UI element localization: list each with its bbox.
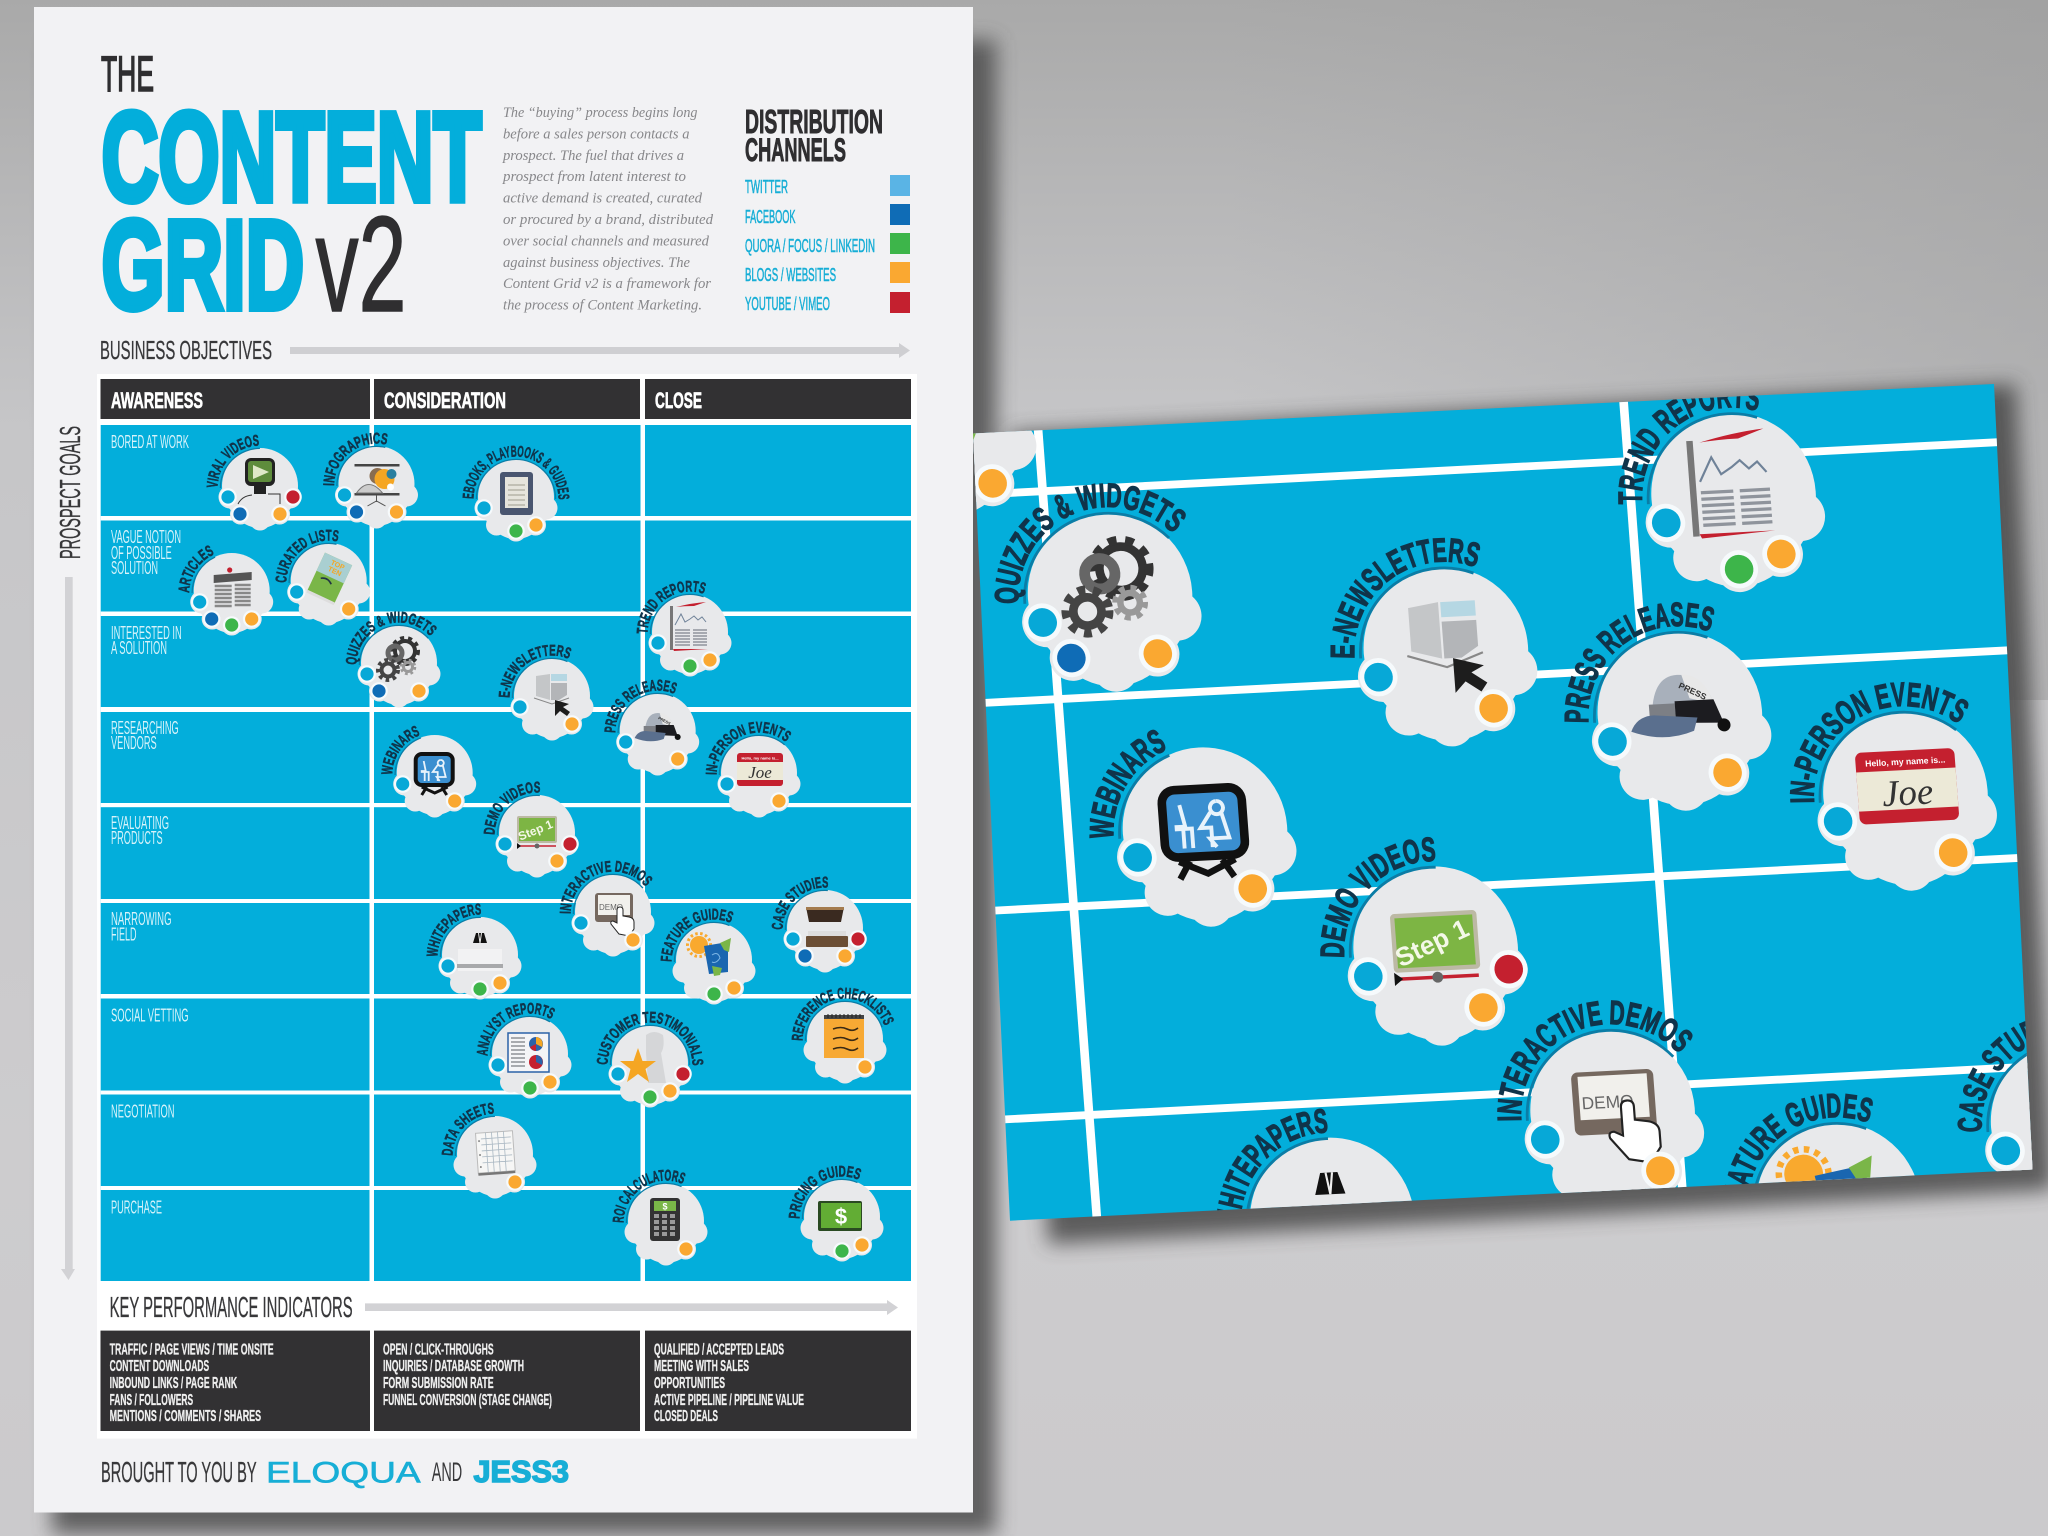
row labels: prospect goals: SOCIAL VETTING — [111, 1005, 189, 1025]
bubble: press releases: PRESS — [657, 715, 672, 726]
row labels: prospect goals: NARROWING — [111, 909, 172, 929]
bubble: analyst reports — [476, 1002, 572, 1098]
intro text block: or procured by a brand, distributed — [503, 212, 714, 228]
kpi box: awareness: TRAFFIC / PAGE VIEWS / TIME ONSITE — [110, 1342, 274, 1358]
bubble: curated lists: TEN — [327, 566, 342, 578]
intro text block: against business objectives. The — [503, 255, 691, 271]
kpi box: close — [645, 1331, 911, 1431]
intro text block: over social channels and measured — [503, 233, 710, 249]
bubble: in-person events: Hello, my name is... — [741, 756, 779, 760]
footer: credits: AND — [432, 1457, 462, 1487]
bubble: trend reports: TREND REPORTS — [636, 580, 706, 634]
footer: credits — [101, 1454, 569, 1490]
row labels: prospect goals: INTERESTED IN — [111, 623, 182, 643]
intro text block: active demand is created, curated — [503, 191, 703, 207]
bubble: ebooks, playbooks and guides — [462, 446, 570, 542]
panel bubble: feature guides: FEATURE GUIDES — [1725, 1093, 1873, 1185]
kpi box: close: OPPORTUNITIES — [654, 1375, 725, 1392]
bubble: demo videos — [484, 781, 579, 878]
panel bubble: quizzes and widgets: QUIZZES & WIDGETS — [994, 482, 1186, 604]
paper sheet: PROSPECT GOALS — [55, 426, 87, 559]
bubble: roi calculators: ROI CALCULATORS — [612, 1169, 686, 1223]
kpi box: awareness: MENTIONS / COMMENTS / SHARES — [110, 1408, 261, 1425]
bubble: reference checklists: REFERENCE CHECKLISTS — [792, 988, 894, 1041]
panel bubble: trend reports: TREND REPORTS — [1618, 396, 1759, 504]
intro text block: before a sales person contacts a — [503, 126, 690, 142]
bubble: quizzes and widgets: QUIZZES & WIDGETS — [346, 611, 437, 664]
arrow: prospect goals — [61, 577, 75, 1280]
kpi box: awareness: CONTENT DOWNLOADS — [110, 1358, 209, 1375]
panel bubble: demo videos: Step 1 — [1390, 913, 1473, 973]
kpi box: consideration: OPEN / CLICK-THROUGHS — [383, 1342, 494, 1358]
row labels: prospect goals: PURCHASE — [111, 1198, 162, 1218]
bubble: in-person events: Joe — [748, 763, 772, 782]
title: CONTENT: CONTENT — [102, 86, 482, 228]
bubble: interactive demos: DEMO — [599, 903, 623, 912]
kpi box: consideration: FUNNEL CONVERSION (STAGE CHANGE) — [383, 1392, 552, 1409]
row labels: prospect goals: NEGOTIATION — [111, 1102, 174, 1122]
column headers: CONSIDERATION — [384, 388, 506, 413]
legend: distribution channels — [745, 103, 910, 314]
bubble: curated lists: CURATED LISTS — [275, 530, 339, 582]
intro text block: the process of Content Marketing. — [503, 298, 702, 314]
panel bubble: press releases: PRESS RELEASES — [1564, 602, 1714, 722]
panel bubble: in-person events: Joe — [1881, 770, 1934, 814]
bubble: analyst reports: ANALYST REPORTS — [476, 1002, 555, 1056]
title: v2: v2 — [316, 188, 406, 340]
bubble: in-person events: IN-PERSON EVENTS — [706, 722, 792, 774]
bubble: pricing guides — [786, 1163, 884, 1262]
arrow: key performance indicators — [365, 1300, 898, 1315]
grid — [101, 425, 911, 1281]
white backing of grid — [97, 374, 917, 1439]
kpi box: close: ACTIVE PIPELINE / PIPELINE VALUE — [654, 1392, 804, 1409]
kpi box: consideration — [374, 1331, 640, 1431]
legend: distribution channels: FACEBOOK — [745, 207, 796, 227]
paper sheet — [34, 7, 973, 1512]
bubble: data sheets — [439, 1100, 536, 1198]
row labels: prospect goals: SOLUTION — [111, 558, 158, 578]
bubble: customer testimonials: CUSTOMER TESTIMONIALS — [596, 1012, 704, 1066]
bubble: demo videos: Step 1 — [516, 817, 555, 844]
intro text block: prospect. The fuel that drives a — [502, 148, 684, 164]
panel bubble: interactive demos: DEMO — [1581, 1091, 1634, 1113]
bubble: feature guides: FEATURE GUIDES — [660, 908, 734, 962]
footer: credits: JESS3 — [474, 1454, 569, 1489]
panel bubble: e-newsletters — [1330, 538, 1538, 746]
bubble: viral videos: VIRAL VIDEOS — [206, 434, 259, 488]
panel bubble: press releases — [1564, 602, 1772, 811]
bubble: e-newsletters — [498, 644, 594, 740]
bubble: curated lists — [275, 530, 370, 626]
kpi box: close: MEETING WITH SALES — [654, 1358, 749, 1375]
bubble: interactive demos — [560, 860, 654, 956]
footer: credits: BROUGHT TO YOU BY — [101, 1457, 257, 1489]
column headers: AWARENESS — [111, 388, 203, 413]
bubble: pricing guides: $ — [835, 1204, 847, 1229]
bubble: reference checklists — [792, 988, 894, 1084]
bubble: webinars: WEBINARS — [381, 726, 420, 774]
panel: zoomed crop of the grid — [973, 384, 2032, 1221]
row labels: prospect goals: PRODUCTS — [111, 828, 163, 848]
intro text block — [502, 105, 714, 314]
legend: distribution channels: YOUTUBE / VIMEO — [745, 294, 830, 314]
panel bubble: whitepapers: WHITEPAPERS — [1217, 1108, 1328, 1210]
heading: business objectives: BUSINESS OBJECTIVES — [100, 335, 272, 365]
kpi box: consideration: FORM SUBMISSION RATE — [383, 1375, 494, 1392]
bubble: curated lists: TOP — [329, 559, 345, 572]
legend: distribution channels: CHANNELS — [745, 132, 846, 168]
kpi box: close: CLOSED DEALS — [654, 1408, 718, 1425]
panel bubble: e-newsletters: E-NEWSLETTERS — [1330, 538, 1480, 658]
bubble: demo videos: DEMO VIDEOS — [484, 781, 540, 834]
panel bubble: webinars: WEBINARS — [1089, 730, 1166, 838]
intro text block: prospect from latent interest to — [502, 169, 686, 185]
bubble: e-newsletters: E-NEWSLETTERS — [498, 644, 572, 698]
bubble: in-person events — [706, 722, 800, 818]
row labels: prospect goals: VENDORS — [111, 733, 157, 753]
column headers — [100, 379, 911, 419]
bubble: webinars — [381, 726, 476, 818]
heading: key performance indicators: KEY PERFORMANCE INDICATORS — [110, 1292, 353, 1324]
paper drop shadow — [52, 40, 996, 1534]
bubble: press releases: PRESS RELEASES — [604, 679, 677, 733]
panel bubble: curated lists — [973, 430, 1036, 510]
bubble: viral videos — [206, 434, 302, 530]
panel bubble: in-person events: IN-PERSON EVENTS — [1790, 682, 1968, 802]
panel bubble: in-person events: Hello, my name is... — [1865, 755, 1946, 769]
panel bubble: feature guides — [1725, 1093, 1915, 1185]
bubble: data sheets: DATA SHEETS — [442, 1102, 494, 1156]
bubble: infographics — [323, 432, 418, 528]
bubble: infographics: INFOGRAPHICS — [323, 432, 388, 486]
bubble: case studies: CASE STUDIES — [772, 876, 828, 930]
row labels: prospect goals: BORED AT WORK — [111, 432, 189, 452]
row labels: prospect goals: RESEARCHING — [111, 718, 179, 738]
legend: distribution channels: BLOGS / WEBSITES — [745, 265, 836, 285]
panel bubble: in-person events — [1790, 682, 1997, 891]
panel bubble: press releases: PRESS — [1677, 680, 1708, 702]
panel bubble: case studies — [1957, 1021, 2032, 1172]
panel bubble: interactive demos — [1497, 1000, 1704, 1194]
legend: distribution channels: QUORA / FOCUS / LINKEDIN — [745, 236, 875, 256]
intro text block: Content Grid v2 is a framework for — [503, 276, 711, 292]
kpi box: awareness: INBOUND LINKS / PAGE RANK — [110, 1375, 237, 1392]
legend: distribution channels: DISTRIBUTION — [745, 103, 883, 140]
panel bubble: quizzes and widgets — [994, 482, 1202, 692]
bubble: whitepapers — [426, 903, 522, 1000]
row labels: prospect goals: OF POSSIBLE — [111, 543, 172, 563]
row labels: prospect goals: A SOLUTION — [111, 638, 167, 658]
kpi box: awareness: FANS / FOLLOWERS — [110, 1392, 193, 1409]
panel bubble: whitepapers — [1217, 1108, 1412, 1210]
panel bubble: demo videos — [1320, 836, 1528, 1046]
title: THE: THE — [101, 46, 154, 102]
footer: credits: ELOQUA — [266, 1456, 421, 1490]
bubble: feature guides — [660, 908, 756, 1004]
bubble: pricing guides: PRICING GUIDES — [788, 1166, 862, 1218]
bubble: articles — [178, 545, 274, 636]
row labels: prospect goals: VAGUE NOTION — [111, 527, 181, 547]
bubble: customer testimonials — [596, 1012, 704, 1108]
bubble: case studies — [772, 876, 867, 972]
kpi box: consideration: INQUIRIES / DATABASE GROWTH — [383, 1358, 524, 1375]
arrow: business objectives — [290, 343, 910, 358]
bubble: roi calculators — [610, 1167, 708, 1266]
panel bubble: trend reports — [1618, 396, 1826, 592]
title: GRID: GRID — [102, 194, 304, 336]
bubble: whitepapers: WHITEPAPERS — [426, 903, 481, 956]
column headers: CLOSE — [655, 388, 702, 413]
bubble: ebooks, playbooks and guides: EBOOKS, PLAYBOOKS & GUIDES — [462, 446, 570, 500]
panel bubble: webinars — [1089, 730, 1296, 927]
panel bubble: demo videos: DEMO VIDEOS — [1320, 836, 1436, 958]
bubble: articles: ARTICLES — [178, 545, 214, 593]
bubble: roi calculators: $ — [662, 1202, 668, 1212]
bubble: press releases — [604, 679, 700, 776]
panel shadow — [1010, 384, 2048, 1244]
bubble: quizzes and widgets — [346, 611, 440, 708]
bubble: interactive demos: INTERACTIVE DEMOS — [560, 860, 652, 914]
bubble: trend reports — [636, 580, 732, 676]
row labels: prospect goals: FIELD — [111, 925, 136, 945]
panel bubble: interactive demos: INTERACTIVE DEMOS — [1497, 1000, 1692, 1121]
kpi box: awareness — [100, 1331, 370, 1431]
legend: distribution channels: TWITTER — [745, 177, 788, 197]
kpi box: close: QUALIFIED / ACCEPTED LEADS — [654, 1342, 784, 1358]
row labels: prospect goals: EVALUATING — [111, 813, 169, 833]
intro text block: The “buying” process begins long — [503, 105, 698, 121]
row labels: prospect goals — [111, 432, 189, 1218]
